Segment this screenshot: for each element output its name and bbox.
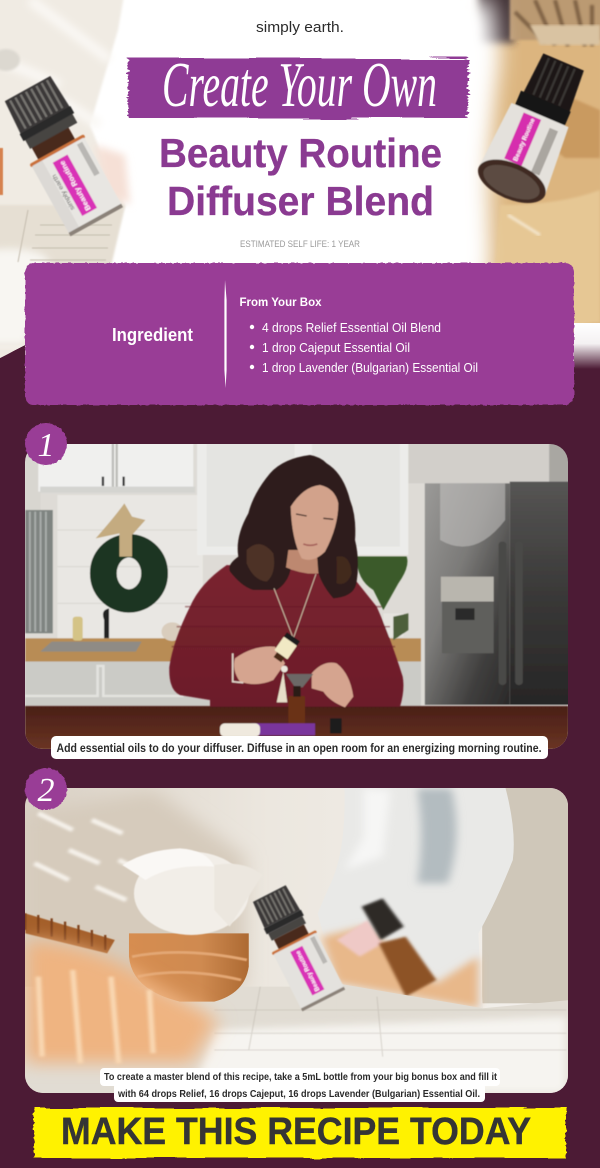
- ingredient list: 1 drop Cajeput Essential Oil: [262, 340, 410, 355]
- dropper bottle: [271, 632, 300, 664]
- heading: Ingredient: Ingredient: [112, 325, 193, 345]
- black cap: [330, 718, 342, 733]
- sweater: [169, 565, 403, 707]
- tassel: [277, 672, 287, 702]
- step badge 1: 1: [38, 427, 54, 464]
- title: Beauty Routine Diffuser Blend: Diffuser Blend: [167, 178, 434, 224]
- logo: simply earth: simply earth.: [256, 19, 344, 36]
- ingredient list: [250, 320, 478, 375]
- title: Beauty Routine Diffuser Blend: [159, 130, 442, 224]
- hair: [229, 455, 358, 598]
- heading: From Your Box: From Your Box: [240, 295, 322, 309]
- pink band: [53, 154, 97, 216]
- photo: bottle with diffuser and mirror: [23, 787, 570, 1097]
- caption: step 1: Add essential oils to do your diffuser. Diffuse in an open room for an energizing morning routine.: [56, 743, 542, 755]
- heading banner: Create Your Own: [128, 49, 468, 120]
- caption: step 2: [100, 1068, 500, 1102]
- icon: left essential oil bottle: Beauty Routine: [58, 159, 93, 212]
- figure: woman and oil bottle: [25, 455, 568, 749]
- photo: woman adding oil in kitchen: [23, 440, 570, 750]
- ingredient list: 1 drop Lavender (Bulgarian) Essential Oil: [262, 360, 478, 375]
- pink band: [504, 112, 541, 166]
- hands: [234, 646, 285, 684]
- step badge 2: 2: [38, 772, 54, 809]
- icon: bottle in photo: Beauty Routine: [294, 949, 321, 992]
- purple card: [252, 723, 315, 735]
- shelf life note: ESTIMATED SELF LIFE: 1 YEAR: [240, 239, 360, 250]
- funnel and amber bottle: [286, 674, 313, 687]
- divider: [224, 280, 227, 388]
- heading banner: Create Your Own: Create Your Own: [162, 49, 437, 120]
- title: Beauty Routine Diffuser Blend: Beauty Routine: [159, 130, 442, 176]
- table: [25, 706, 568, 749]
- face and neck: [286, 550, 318, 574]
- caption: step 2: To create a master blend of this recipe, take a 5mL bottle from your big bonus box and fill it: [104, 1072, 498, 1083]
- icon: right essential oil bottle: Beauty Routine: [512, 117, 537, 162]
- mirror: [482, 788, 514, 1004]
- ingredient list: 4 drops Relief Essential Oil Blend: [262, 320, 441, 335]
- icon: bottle in photo: [247, 882, 346, 1012]
- table: [23, 987, 341, 1097]
- caption: step 1: [51, 736, 548, 759]
- white bottle: [220, 723, 260, 737]
- call to action banner: MAKE THIS RECIPE TODAY: [61, 1111, 531, 1153]
- hair brush: [25, 913, 115, 953]
- wooden diffuser base: [129, 933, 249, 1002]
- plant: [357, 557, 407, 610]
- step badge 1: [25, 423, 67, 465]
- necklace: [274, 574, 316, 638]
- icon: left essential oil bottle: simply earth: [52, 173, 76, 211]
- flower diffuser: [134, 852, 249, 935]
- header photo background: [0, 0, 600, 370]
- caption: step 2: with 64 drops Relief, 16 drops Cajeput, 16 drops Lavender (Bulgarian) Essential Oil.: [117, 1089, 480, 1100]
- panel: ingredients: [25, 263, 574, 405]
- icon: left essential oil bottle: [0, 75, 126, 237]
- step badge 2: [25, 768, 67, 810]
- icon: right essential oil bottle: [472, 48, 596, 212]
